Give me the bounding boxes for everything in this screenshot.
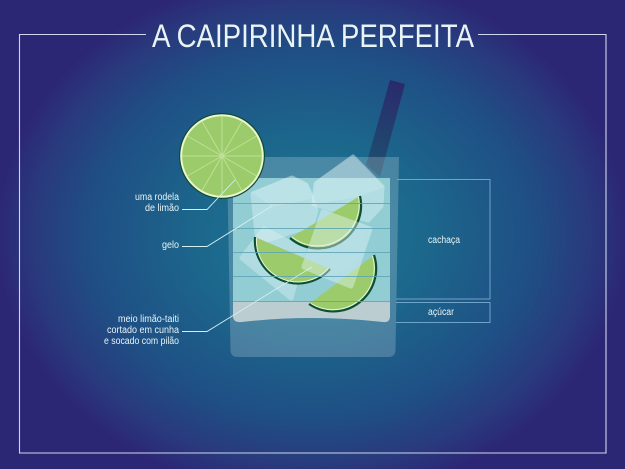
callout: meio limão-taiti: [104, 267, 312, 347]
level lines: [233, 204, 390, 302]
wedge: left: [255, 237, 330, 283]
pith: [180, 114, 264, 198]
ice: top right: [312, 155, 385, 220]
label box: cachaça: cachaça: [428, 235, 460, 246]
callout: gelo: gelo: [162, 240, 179, 251]
straw: [366, 80, 405, 177]
ice cubes behind wedges: [242, 155, 385, 298]
liquid: açúcar: [233, 302, 390, 322]
label box: cachaça: [396, 180, 490, 299]
ice: center: [304, 212, 370, 286]
callout: meio limão-taiti: cortado em cunha: [107, 325, 179, 336]
wedge: top: [290, 196, 361, 248]
pulp: [182, 116, 262, 196]
wedge: right: [309, 255, 376, 311]
ice: top left: [251, 176, 316, 243]
segments: [182, 116, 262, 196]
label box: açúcar: açúcar: [428, 307, 455, 318]
label box: açúcar: [396, 302, 490, 322]
callout: meio limão-taiti: e socado com pilão: [104, 336, 179, 347]
callout: meio limão-taiti: meio limão-taiti: [118, 314, 179, 325]
lime slice: [179, 113, 265, 199]
callout: gelo: [162, 206, 272, 251]
callout: uma rodela de limão: [135, 180, 235, 214]
callout: uma rodela de limão: de limão: [145, 203, 179, 214]
title: A CAIPIRINHA PERFEITA: [152, 18, 475, 54]
liquid: cachaça: [233, 178, 390, 302]
ice: left: [242, 229, 304, 298]
lime wedges: [255, 196, 376, 311]
callout: uma rodela de limão: uma rodela: [135, 192, 179, 203]
glass body: [227, 157, 399, 357]
core: [220, 154, 224, 158]
glass: [227, 155, 399, 357]
rind: [179, 113, 265, 199]
